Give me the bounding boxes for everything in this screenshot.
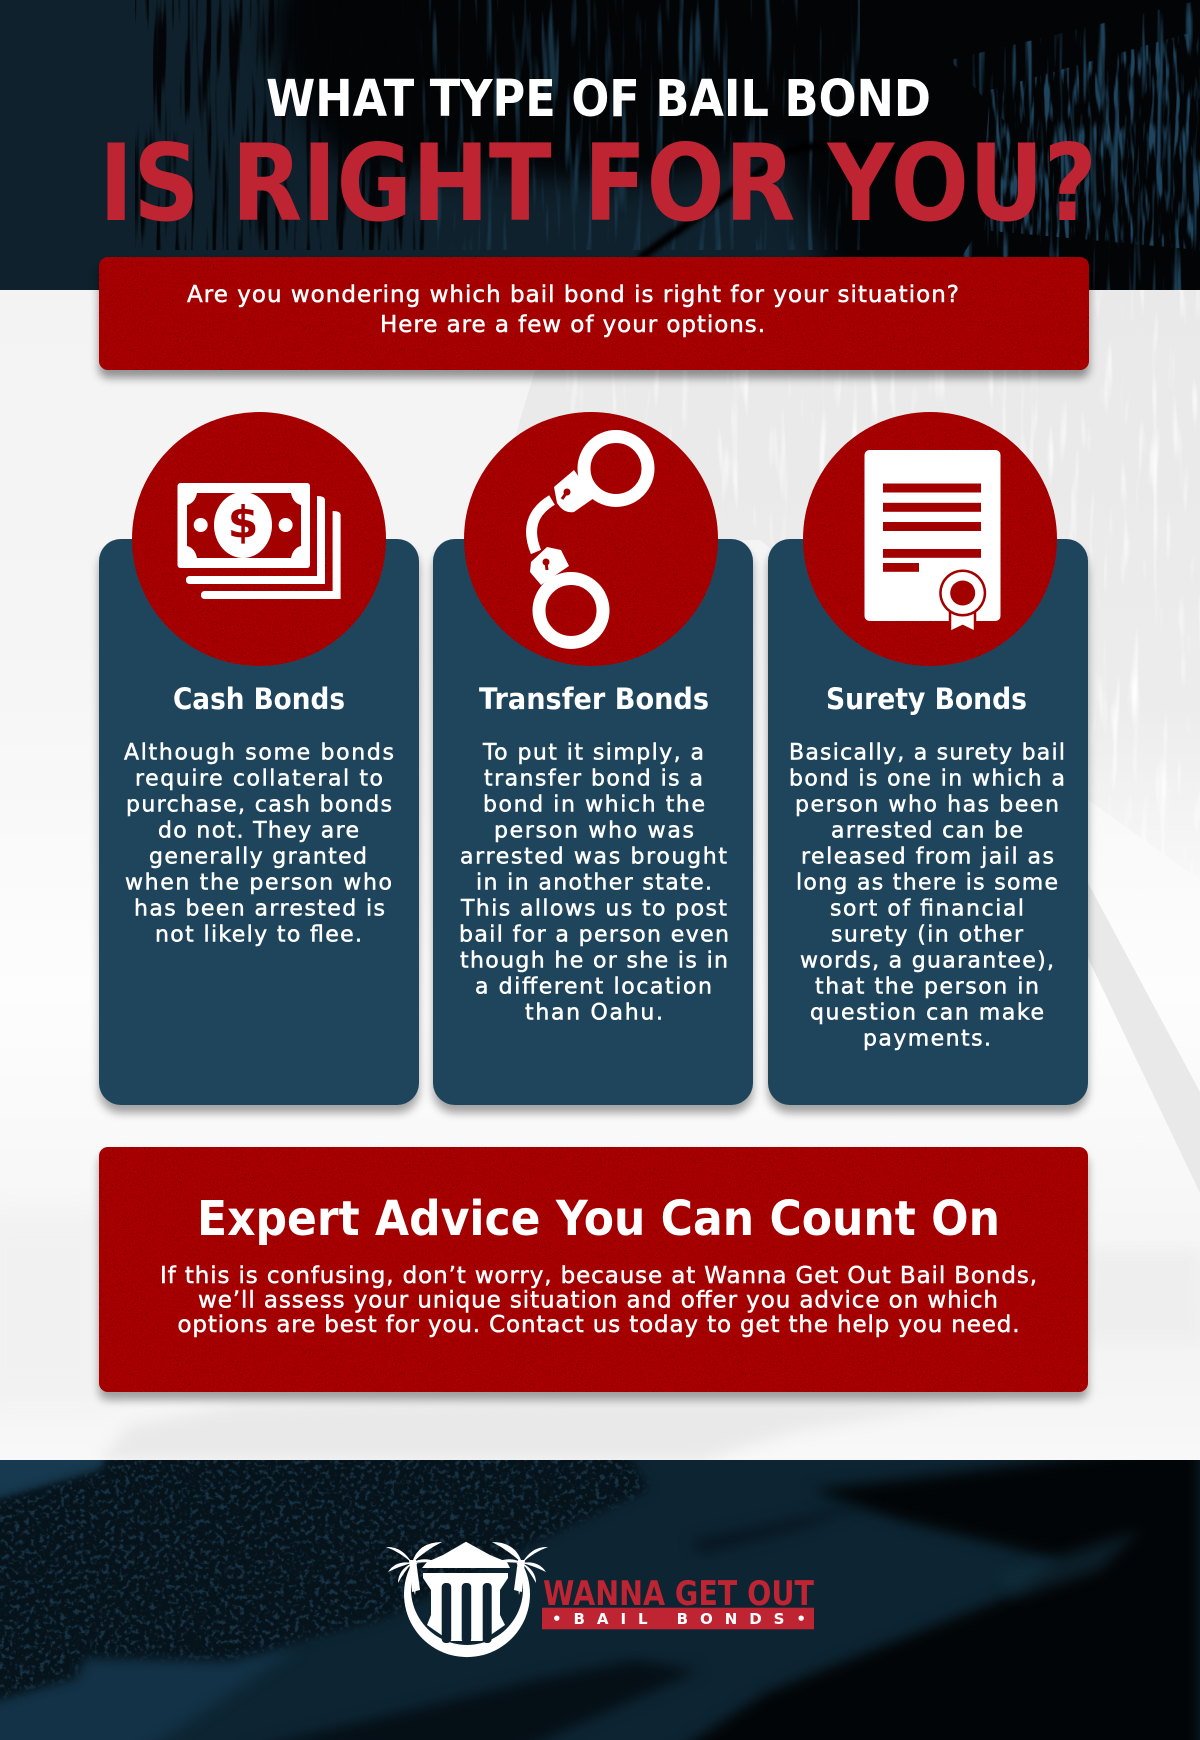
footer background with coastal hillside [0,1440,1200,1740]
text: surety bonds: arrested can be [831,818,1023,844]
panel: surety bonds [768,412,1088,1113]
text: transfer bonds: a different location [475,974,712,1000]
text: surety bonds: long as there is some [796,870,1058,896]
text: surety bonds: person who has been [795,792,1059,818]
heading: transfer bonds: Transfer Bonds [479,682,709,716]
header background with dark palm [0,0,1200,320]
text: surety bonds: that the person in [815,974,1039,1000]
text: transfer bonds: To put it simply, a [482,740,704,766]
logo emblem: palm ring and courthouse [386,1542,548,1657]
icon: cash stack [132,412,386,666]
panel: transfer bonds [433,412,753,1113]
text: surety bonds: bond is one in which a [789,766,1065,792]
callout text [160,1263,1037,1338]
icon: handcuffs [464,412,718,666]
text: surety bonds: sort of financial [830,896,1024,922]
text: surety bonds: Basically, a surety bail [789,740,1065,766]
heading: surety bonds: Surety Bonds [826,682,1027,716]
callout text: options are best for you. Contact us today to get the help you need. [178,1312,1020,1338]
intro text: Here are a few of your options. [380,312,765,338]
panel: expert advice callout [99,1147,1088,1400]
icon: certificate document [803,412,1057,666]
logo: Wanna Get Out Bail Bonds [386,1542,815,1657]
text: surety bonds: question can make [810,1000,1044,1026]
icon: cash stack: $ [228,497,258,548]
logo wordmark: WANNA GET OUT [543,1574,815,1614]
text: cash bonds: do not. They are [158,818,359,844]
callout heading: Expert Advice You Can Count On [197,1191,1000,1247]
text: surety bonds: payments. [863,1026,991,1052]
callout text: If this is confusing, don’t worry, because at Wanna Get Out Bail Bonds, [160,1263,1037,1289]
palm right [492,1542,548,1595]
heading: cash bonds: Cash Bonds [173,682,345,716]
text: cash bonds: require collateral to [135,766,383,792]
text: transfer bonds: in in another state. [476,870,712,896]
logo tagline bar: •BAIL BONDS• [552,1610,806,1628]
text: transfer bonds [459,740,729,1026]
title [99,70,1097,245]
text: surety bonds [789,740,1065,1052]
text: cash bonds: when the person who [125,870,392,896]
text: transfer bonds: bond in which the [483,792,705,818]
text: cash bonds: generally granted [149,844,367,870]
text: transfer bonds: transfer bond is a [484,766,703,792]
intro text [187,282,959,338]
text: surety bonds: surety (in other [831,922,1024,948]
text: transfer bonds: person who was [494,818,694,844]
body background with faded palm and beach [0,290,1200,1460]
text: transfer bonds: though he or she is in [460,948,728,974]
palm left [386,1542,442,1595]
text: cash bonds: Although some bonds [124,740,394,766]
text: transfer bonds: This allows us to post [460,896,727,922]
panel: intro banner [99,257,1089,378]
text: surety bonds: released from jail as [801,844,1054,870]
text: cash bonds: has been arrested is [134,896,385,922]
title line 1: WHAT TYPE OF BAIL BOND [266,70,931,129]
intro text: Are you wondering which bail bond is right for your situation? [187,282,959,308]
text: transfer bonds: bail for a person even [459,922,729,948]
text: transfer bonds: than Oahu. [525,1000,663,1026]
text: cash bonds: not likely to flee. [155,922,362,948]
text: cash bonds [124,740,394,948]
callout text: we’ll assess your unique situation and offer you advice on which [198,1288,998,1314]
text: surety bonds: words, a guarantee), [800,948,1054,974]
text: cash bonds: purchase, cash bonds [126,792,392,818]
panel: cash bonds [99,412,419,1113]
text: transfer bonds: arrested was brought [460,844,727,870]
